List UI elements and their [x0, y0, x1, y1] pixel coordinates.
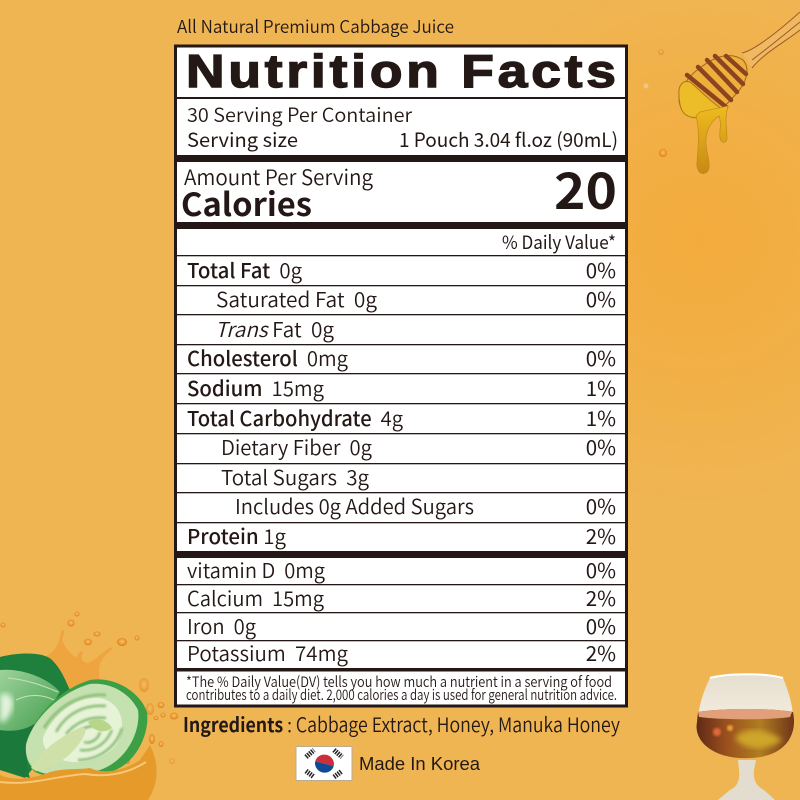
- juice wave bottom: [0, 745, 157, 800]
- nutrient rows: Cholesterol 0mg: [187, 342, 349, 372]
- servings: 1 Pouch 3.04 fl.oz (90mL): [399, 124, 618, 153]
- nutrient rows: 0%: [586, 283, 616, 313]
- servings: [187, 99, 618, 153]
- footnote: *The % Daily Value(DV) tells you how much a nutrient in a serving of food: [186, 671, 612, 692]
- nutrient rows: Dietary Fiber 0g: [221, 431, 373, 461]
- nutrient rows: [187, 254, 616, 667]
- splash droplets: [0, 612, 178, 764]
- tagline: All Natural Premium Cabbage Juice: [177, 14, 454, 39]
- nutrient rows: Iron 0g: [187, 610, 257, 640]
- cut cabbage half: [26, 679, 147, 777]
- nutrient rows: 2%: [586, 582, 616, 612]
- nutrient rows: Potassium 74mg: [187, 637, 349, 667]
- juice splash top: [46, 630, 113, 692]
- calories: 20: [554, 152, 617, 224]
- nutrient rows: 0%: [586, 431, 616, 461]
- nutrient rows: 2%: [586, 637, 616, 667]
- row dividers: [176, 255, 626, 672]
- illustration: glass of honey: [697, 674, 794, 800]
- daily value header: % Daily Value*: [502, 229, 616, 255]
- nutrient rows: Calcium 15mg: [187, 582, 325, 612]
- made in korea: Made In Korea: [359, 754, 481, 774]
- nutrient rows: 0%: [586, 610, 616, 640]
- nutrient rows: Total Carbohydrate 4g: [187, 402, 404, 432]
- calories: Calories: [181, 180, 312, 226]
- ingredients: Ingredients : Cabbage Extract, Honey, Manuka Honey: [183, 709, 620, 738]
- icon: korean flag: [296, 746, 352, 780]
- nutrient rows: Total Sugars 3g: [221, 461, 370, 491]
- nutrient rows: Total Fat 0g: [187, 254, 303, 284]
- servings: Serving size: [187, 124, 298, 153]
- nutrient rows: 2%: [586, 520, 616, 550]
- nutrition facts panel: [176, 45, 626, 706]
- nutrient rows: Trans Fat 0g: [215, 313, 335, 343]
- calories: Amount Per Serving: [184, 162, 373, 192]
- nutrient rows: Includes 0g Added Sugars: [235, 490, 474, 520]
- honey droplets: [644, 49, 667, 157]
- icon: honey dipper: [679, 12, 800, 174]
- dark outer leaf: [0, 654, 70, 778]
- footnote: [186, 671, 617, 705]
- nutrient rows: Saturated Fat 0g: [216, 283, 378, 313]
- nutrient rows: 1%: [586, 372, 616, 402]
- whole cabbage head: [0, 670, 60, 732]
- title: Nutrition Facts: [186, 45, 620, 97]
- footnote: contributes to a daily diet. 2,000 calories a day is used for general nutrition advice.: [186, 684, 617, 705]
- nutrient rows: vitamin D 0mg: [187, 554, 326, 584]
- servings: 30 Serving Per Container: [187, 99, 413, 128]
- nutrient rows: 0%: [586, 254, 616, 284]
- nutrient rows: Protein 1g: [187, 520, 287, 550]
- calories: [181, 152, 617, 226]
- nutrient rows: Sodium 15mg: [187, 372, 325, 402]
- illustration: cabbage and juice splash: [0, 612, 178, 800]
- nutrient rows: 0%: [586, 342, 616, 372]
- nutrient rows: 1%: [586, 402, 616, 432]
- nutrient rows: 0%: [586, 490, 616, 520]
- nutrient rows: 0%: [586, 554, 616, 584]
